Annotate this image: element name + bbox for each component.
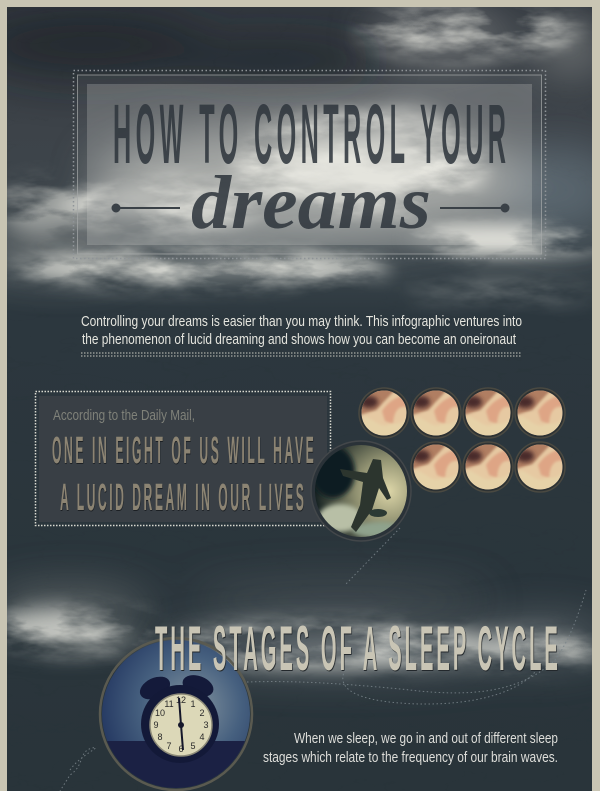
intro text: [81, 313, 522, 348]
person 6: [463, 442, 513, 492]
clock numerals: 10: [155, 708, 165, 718]
left ornament: [112, 204, 180, 212]
right ornament: [440, 204, 509, 212]
person 4: [515, 388, 565, 438]
section heading: THE STAGES OF A SLEEP CYCLE: [155, 613, 558, 683]
clock numerals: 6: [178, 744, 184, 754]
clock numerals: 4: [199, 732, 205, 742]
clock numerals: 8: [157, 732, 163, 742]
clock numerals: 3: [203, 720, 209, 730]
statistic line 1: ONE IN EIGHT OF US WILL HAVE: [52, 428, 314, 471]
clock numerals: 1: [190, 699, 196, 709]
clock body: [141, 685, 219, 763]
person 3: [463, 388, 513, 438]
person 7: [515, 442, 565, 492]
clock numerals: 11: [164, 699, 174, 709]
alarm clock photo circle: [100, 638, 252, 791]
bright cloud masses: [40, 107, 550, 658]
dotted connector lines: [60, 528, 586, 791]
title inner panel: [87, 84, 532, 245]
statistic box: [36, 392, 330, 526]
title outer dotted border: [74, 70, 546, 258]
clock numerals: 5: [190, 741, 196, 751]
clock hands: [179, 698, 183, 750]
dreamer photo circle: [311, 441, 411, 541]
clock numerals: 12: [176, 695, 186, 705]
clock numerals: 7: [166, 741, 172, 751]
box dotted border: [36, 392, 330, 526]
intro dotted rule: [81, 353, 521, 356]
person 5: [411, 442, 461, 492]
clock numerals: 2: [199, 708, 205, 718]
sleep description: [263, 730, 558, 766]
clock numerals: [153, 695, 209, 754]
title script word: dreams: [191, 161, 431, 245]
source note: According to the Daily Mail,: [53, 407, 195, 424]
clock bells: [140, 676, 170, 700]
clock face: [150, 694, 212, 756]
icons: one in eight people: [359, 388, 565, 492]
box fill: [39, 396, 327, 522]
title panel: [74, 70, 546, 258]
clock numerals: 9: [153, 720, 159, 730]
person 1: [359, 388, 409, 438]
title frame line: [78, 75, 542, 254]
title line 1: HOW TO CONTROL YOUR: [113, 88, 506, 182]
statistic line 2: A LUCID DREAM IN OUR LIVES: [60, 475, 304, 518]
person 2: [411, 388, 461, 438]
